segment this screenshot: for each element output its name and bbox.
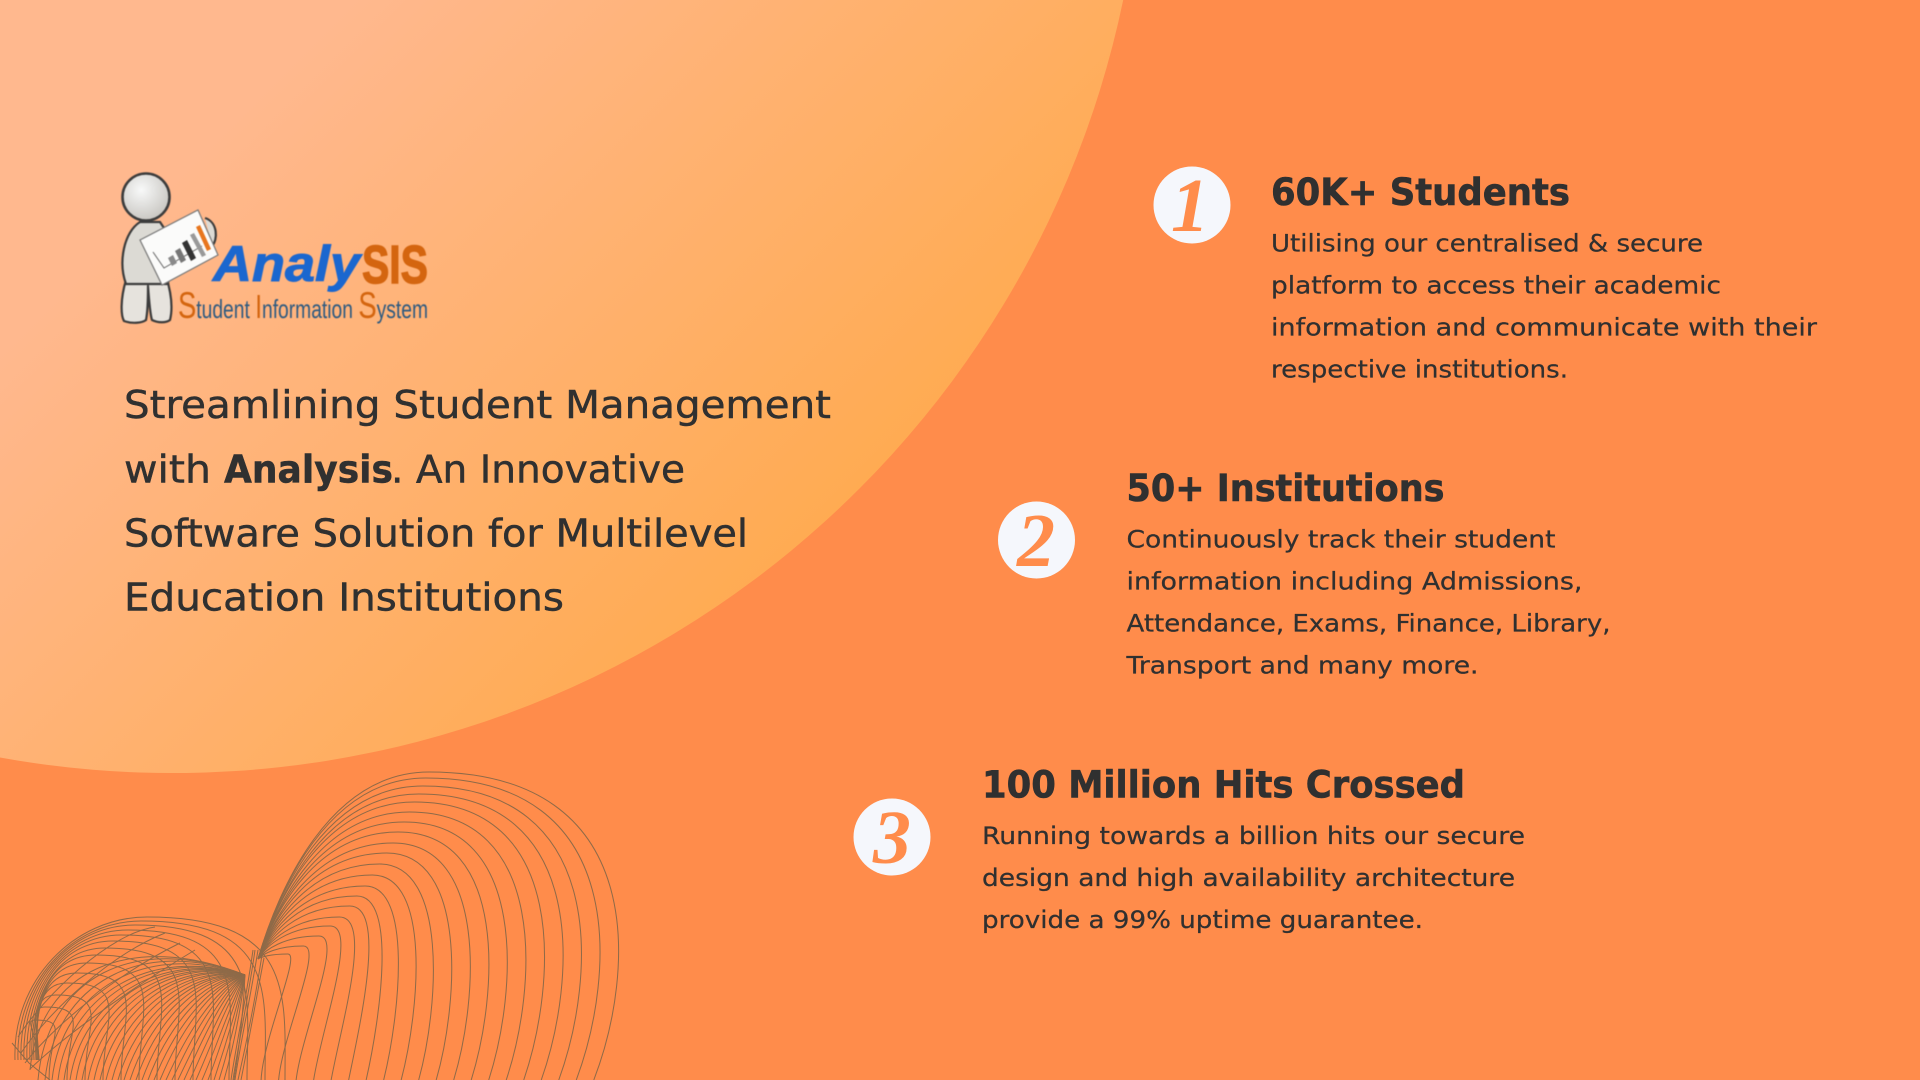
number badge 2: 2 [1016,499,1055,583]
body 1: Utilising our centralised & secure [1271,230,1703,258]
lead statement [124,383,831,620]
body 3: provide a 99% uptime guarantee. [982,906,1423,934]
stat 1: 60K+ Students [1154,164,1817,384]
number badge 3: 3 [872,796,911,880]
right lobe of ribbon [258,772,619,1080]
stat 3: 100 Million Hits Crossed [854,764,1525,934]
figure torso [122,222,172,284]
heading 3: 100 Million Hits Crossed [982,764,1465,806]
logo figure [122,174,218,323]
lead statement: Education Institutions [124,576,564,620]
body 3: Running towards a billion hits our secure [982,822,1525,850]
number badge 2 [998,499,1075,583]
logo wordmark SIS: SIS [362,235,428,295]
number badge 1 [1154,164,1230,248]
number badge 1: 1 [1171,164,1209,248]
heading 2: 50+ Institutions [1126,467,1444,510]
lead statement: . An Innovative [391,448,685,492]
left lobe arcs of ribbon [15,917,285,1080]
body 2 [1125,526,1610,680]
left lobe fan lines of ribbon [12,950,264,1080]
lead statement: Software Solution for Multilevel [124,512,748,556]
figure legs [122,276,171,323]
figure head [122,174,170,220]
lead statement: with [124,448,211,492]
body 2: Continuously track their student [1126,526,1556,554]
logo tagline: Student Information System [178,285,428,326]
body 1: information and communicate with their [1271,314,1817,342]
body 1: respective institutions. [1271,356,1568,384]
lead statement: Analysis [224,448,393,492]
heading 1: 60K+ Students [1271,171,1570,214]
body 1 [1271,230,1817,384]
logo wordmark Analy: Analy [211,236,362,292]
body 2: Transport and many more. [1125,652,1478,680]
body 2: information including Admissions, [1126,568,1582,596]
body 1: platform to access their academic [1271,272,1721,300]
figure arm [205,218,216,246]
decorative wire ribbon [12,772,619,1080]
logo chart board [140,210,218,285]
gradient circle panel [0,0,1123,773]
body 3: design and high availability architecture [982,864,1515,892]
logo: AnalySIS Student Information System [122,174,428,326]
body 2: Attendance, Exams, Finance, Library, [1126,610,1610,638]
number badge 3 [854,796,930,880]
lead statement: Streamlining Student Management [124,383,831,427]
body 3 [982,822,1525,934]
board bars [153,225,211,268]
stat 2: 50+ Institutions [998,467,1610,680]
